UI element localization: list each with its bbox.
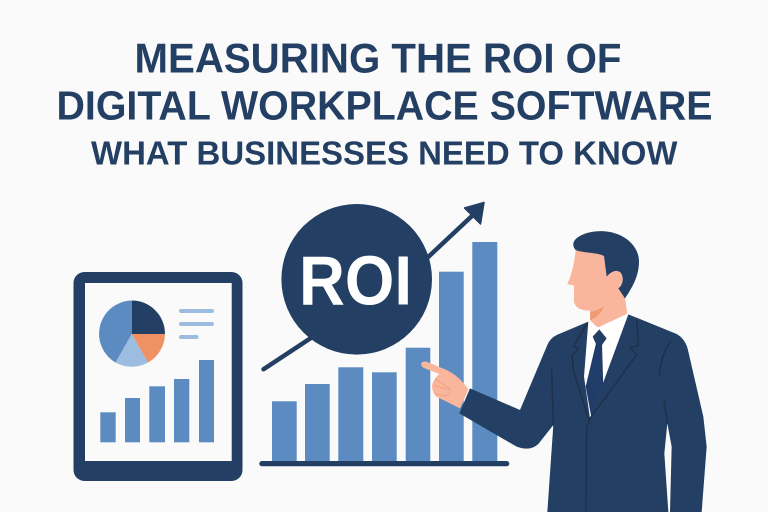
subtitle: WHAT BUSINESSES NEED TO KNOW — [91, 134, 678, 171]
legend lines — [179, 309, 214, 339]
businessman pointing — [421, 231, 707, 512]
badge circle — [281, 204, 432, 355]
tablet frame — [74, 272, 242, 481]
necktie — [586, 329, 607, 419]
ROI badge — [281, 204, 432, 355]
chart bars — [272, 242, 497, 461]
pointing hand — [421, 361, 468, 408]
title line 1: MEASURING THE ROI OF — [134, 35, 622, 82]
hair — [573, 231, 639, 298]
face, ear and neck — [567, 249, 627, 328]
suit jacket and arm — [459, 314, 707, 512]
tablet screen — [85, 283, 232, 461]
pie chart — [99, 300, 165, 367]
title block — [56, 35, 712, 171]
title line 2: DIGITAL WORKPLACE SOFTWARE — [56, 82, 712, 128]
tablet bar chart — [100, 360, 214, 442]
badge label: ROI — [299, 241, 412, 319]
rising arrow — [264, 202, 484, 369]
chart baseline — [259, 461, 509, 466]
suit seam lines — [552, 320, 671, 512]
white shirt — [584, 313, 633, 393]
neck shadow — [590, 306, 604, 320]
tablet dashboard — [74, 272, 242, 481]
growth bar chart — [259, 242, 509, 466]
